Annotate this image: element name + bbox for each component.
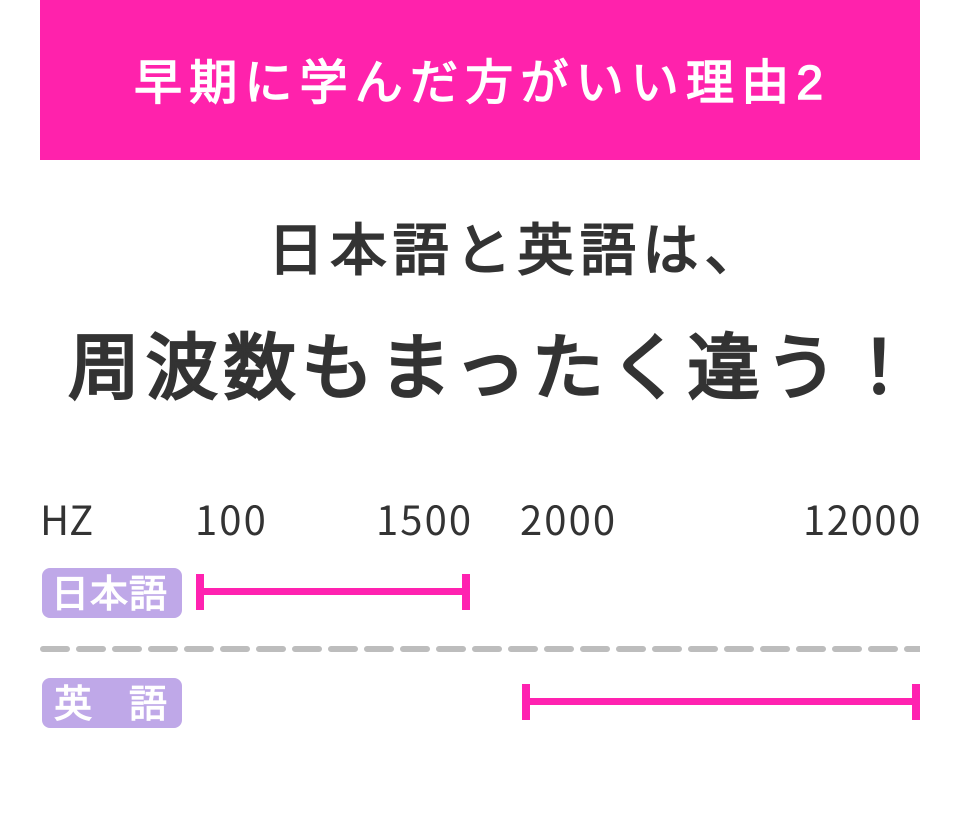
subheading line 2: 周波数もまったく違う！ [68, 329, 921, 409]
label 2000: 2000 [520, 489, 617, 547]
English frequency range bar [522, 684, 920, 720]
header banner [40, 0, 920, 160]
Japanese frequency range bar [196, 574, 470, 610]
label 12000: 12000 [803, 489, 922, 547]
Japanese label pill: 日本語 [51, 563, 168, 618]
English label pill: 語 [129, 673, 167, 728]
English label pill: 英 [54, 673, 92, 728]
label HZ: HZ [40, 489, 93, 547]
label 1500: 1500 [376, 489, 473, 547]
dashed divider [40, 646, 920, 652]
English label pill [42, 678, 182, 728]
header title: 早期に学んだ方がいい理由2 [134, 57, 830, 110]
subheading line 1: 日本語と英語は、 [268, 219, 767, 282]
frequency scale labels [40, 489, 922, 547]
label 100: 100 [195, 489, 268, 547]
